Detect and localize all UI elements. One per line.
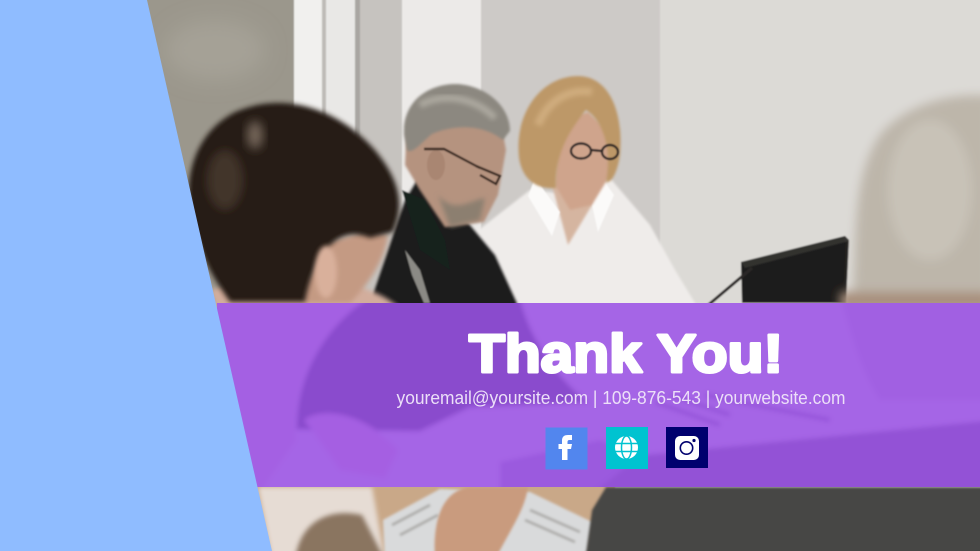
icon: instagram bbox=[666, 427, 708, 468]
table and lower foreground bbox=[255, 485, 980, 551]
light blue slanted panel bbox=[0, 0, 272, 551]
man with glasses bbox=[370, 84, 517, 330]
window frame bbox=[294, 0, 360, 200]
purple band bbox=[217, 303, 980, 487]
icon: website globe bbox=[606, 427, 648, 469]
band photo tones under purple overlay bbox=[227, 303, 980, 487]
black device on the desk bbox=[700, 236, 849, 312]
glasses bbox=[424, 149, 500, 184]
woman in white shirt bbox=[476, 76, 700, 330]
glasses bbox=[571, 144, 618, 159]
heading: Thank You!: Thank You! bbox=[469, 324, 783, 384]
left foreground person with dark hair bbox=[189, 103, 420, 420]
right foreground person bbox=[840, 95, 980, 310]
contact line: youremail@yoursite.com | 109-876-543 | yourwebsite.com bbox=[396, 388, 846, 408]
icon: facebook bbox=[546, 428, 588, 470]
concrete pillar bbox=[140, 0, 294, 310]
